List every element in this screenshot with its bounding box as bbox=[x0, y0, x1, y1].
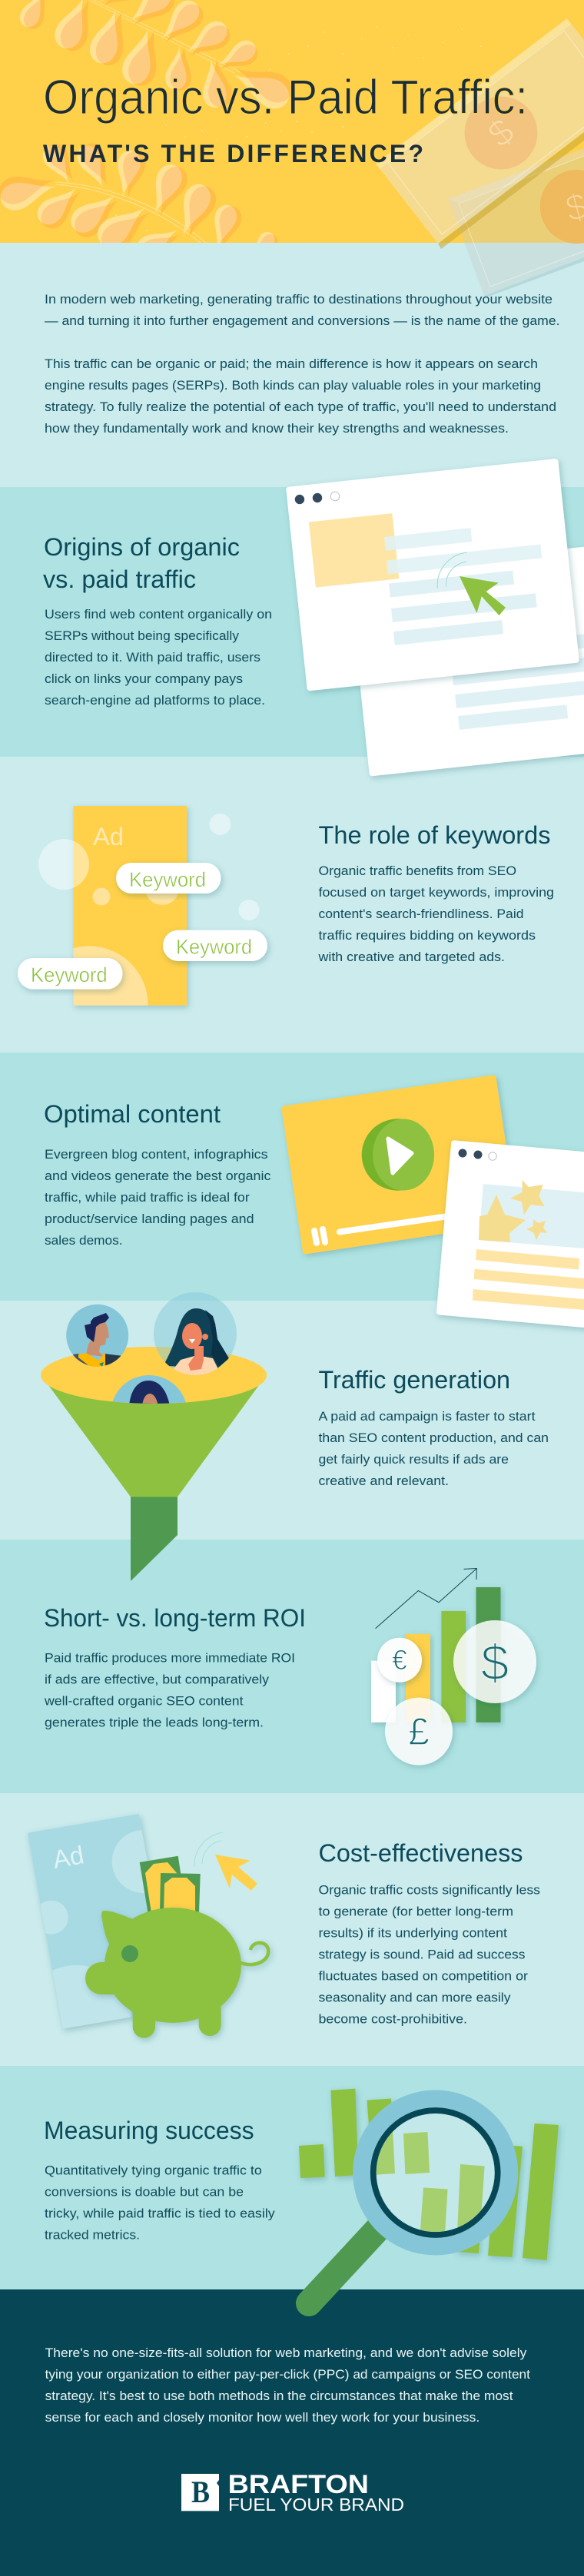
heading: cost-effectiveness: Cost-effectiveness bbox=[318, 1839, 523, 1867]
text block: keywords: traffic requires bidding on keywords bbox=[318, 929, 536, 943]
logo: Brafton: BRAFTON bbox=[228, 2470, 369, 2499]
text block: ROI: generates triple the leads long-term. bbox=[45, 1716, 264, 1730]
text block: traffic generation: A paid ad campaign is faster to start bbox=[318, 1410, 536, 1424]
icon: front banknote bbox=[376, 18, 584, 249]
text block: origins: Users find web content organically on bbox=[45, 608, 272, 622]
icon: back browser window bbox=[348, 538, 584, 777]
icon: yellow cursor with click arcs bbox=[194, 1832, 257, 1891]
icon: ad sheet behind piggy bank bbox=[27, 1814, 151, 2033]
text block: ROI: Paid traffic produces more immediate ROI bbox=[45, 1651, 295, 1665]
heading: measuring success: Measuring success bbox=[44, 2117, 254, 2144]
text block: optimal content: Evergreen blog content, infographics bbox=[45, 1148, 267, 1162]
icon: decorative leaf branches bbox=[0, 0, 482, 267]
text block: origins: directed to it. With paid traffic, users bbox=[45, 651, 260, 665]
chart: bars under magnifying glass bbox=[299, 2089, 559, 2303]
heading: origins: Origins of organic bbox=[44, 533, 240, 561]
text block: origins: search-engine ad platforms to place. bbox=[45, 694, 265, 708]
text block: cost-effectiveness: strategy is sound. Paid ad success bbox=[318, 1948, 526, 1962]
heading: origins bbox=[43, 533, 240, 593]
text block: keywords: Organic traffic benefits from SEO bbox=[318, 864, 516, 878]
text block: intro: strategy. To fully realize the potential of each type of traffic, you'll need to understand bbox=[45, 400, 556, 414]
text block: keywords: focused on target keywords, improving bbox=[318, 886, 554, 900]
icon: front banknote: $ bbox=[480, 111, 522, 155]
text block: ROI: well-crafted organic SEO content bbox=[44, 1695, 244, 1709]
subtitle: WHAT'S THE DIFFERENCE? bbox=[43, 140, 423, 167]
text block: measuring success: tricky, while paid traffic is tied to easily bbox=[45, 2207, 276, 2221]
icon: funnel with avatars bbox=[41, 1292, 267, 1581]
text block: cost-effectiveness: become cost-prohibitive. bbox=[318, 2013, 467, 2027]
text block: keywords bbox=[317, 864, 554, 964]
text block: cost-effectiveness: fluctuates based on competition or bbox=[318, 1970, 529, 1984]
text block: optimal content: and videos generate the best organic bbox=[45, 1169, 270, 1183]
text block: conclusion: There's no one-size-fits-all solution for web marketing, and we don't advise solely bbox=[45, 2346, 527, 2360]
text block: optimal content bbox=[45, 1148, 270, 1248]
text block: traffic generation: than SEO content production, and can bbox=[318, 1431, 549, 1445]
icon: ad card with keywords: Ad bbox=[93, 823, 124, 850]
panel: traffic generation band bbox=[0, 1301, 584, 1540]
text block: origins: click on links your company pays bbox=[45, 672, 243, 686]
text block: cost-effectiveness: Organic traffic costs significantly less bbox=[318, 1884, 540, 1898]
icon: ad card with keywords: Keyword bbox=[129, 868, 206, 891]
text block: measuring success bbox=[45, 2164, 276, 2243]
text block: origins bbox=[45, 608, 272, 708]
text block: intro: how they fundamentally work and know their key strengths and weaknesses. bbox=[45, 422, 509, 436]
icon: ad sheet behind piggy bank: Ad bbox=[51, 1840, 86, 1874]
icon: browser window with stars bbox=[436, 1140, 584, 1332]
icon: front browser window with cursor bbox=[286, 459, 579, 691]
panel: header band bbox=[0, 0, 584, 243]
text block: intro: This traffic can be organic or paid; the main difference is how it appears on search bbox=[45, 357, 538, 371]
text block: intro: engine results pages (SERPs). Both kinds can play valuable roles in your marketing bbox=[45, 379, 541, 393]
text block: traffic generation bbox=[318, 1410, 549, 1488]
text block: optimal content: traffic, while paid traffic is ideal for bbox=[45, 1191, 250, 1205]
text block: conclusion bbox=[45, 2346, 530, 2425]
text block: traffic generation: creative and relevant. bbox=[318, 1474, 449, 1488]
heading: ROI: Short- vs. long-term ROI bbox=[44, 1604, 306, 1632]
icon: video player card bbox=[281, 1075, 517, 1255]
text block: ROI: if ads are effective, but comparatively bbox=[45, 1673, 270, 1687]
text block: optimal content: product/service landing pages and bbox=[45, 1212, 254, 1226]
chart: rising bars with currency coins bbox=[371, 1569, 536, 1765]
icon: back banknote bbox=[448, 148, 584, 297]
text block: cost-effectiveness: seasonality and can more easily bbox=[318, 1991, 511, 2005]
heading: keywords: The role of keywords bbox=[318, 821, 550, 849]
text block: measuring success: Quantitatively tying organic traffic to bbox=[45, 2164, 262, 2178]
text block: intro: — and turning it into further engagement and conversions — is the name of the game. bbox=[45, 314, 559, 328]
icon: ad card with keywords: Keyword bbox=[31, 963, 108, 986]
icon: ad card with keywords bbox=[17, 805, 272, 1011]
logo: Brafton: FUEL YOUR BRAND bbox=[228, 2495, 404, 2515]
text block: intro bbox=[45, 293, 559, 436]
heading: origins: vs. paid traffic bbox=[43, 565, 196, 593]
panel: origins band bbox=[0, 487, 584, 757]
logo: Brafton: B bbox=[191, 2475, 210, 2509]
panel: optimal content band bbox=[0, 1053, 584, 1301]
text block: origins: SERPs without being specifically bbox=[45, 629, 240, 643]
heading: traffic generation: Traffic generation bbox=[318, 1366, 510, 1394]
icon: piggy bank with banknotes bbox=[85, 1856, 268, 2038]
text block: cost-effectiveness bbox=[318, 1884, 540, 2027]
text block: conclusion: strategy. It's best to use both methods in the circumstances that make the most bbox=[45, 2389, 513, 2403]
panel: cost-effectiveness band bbox=[0, 1793, 584, 2066]
logo: Brafton bbox=[181, 2470, 404, 2515]
chart: rising bars with currency coins: € bbox=[392, 1644, 407, 1676]
text block: cost-effectiveness: to generate (for better long-term bbox=[318, 1905, 513, 1919]
title: Organic vs. Paid Traffic: bbox=[43, 71, 528, 124]
text block: keywords: with creative and targeted ads. bbox=[317, 950, 505, 964]
text block: traffic generation: get fairly quick results if ads are bbox=[318, 1453, 509, 1467]
text block: keywords: content's search-friendliness. Paid bbox=[318, 907, 524, 921]
panel: ROI band bbox=[0, 1540, 584, 1793]
text block: measuring success: conversions is doable but can be bbox=[45, 2186, 244, 2200]
text block: optimal content: sales demos. bbox=[45, 1234, 123, 1248]
text block: conclusion: tying your organization to either pay-per-click (PPC) ad campaigns or SEO content bbox=[45, 2368, 530, 2382]
text block: cost-effectiveness: results) if its underlying content bbox=[318, 1927, 507, 1941]
panel: intro band bbox=[0, 243, 584, 487]
chart: rising bars with currency coins: $ bbox=[481, 1634, 509, 1691]
panel: keywords band bbox=[0, 757, 584, 1053]
text block: conclusion: sense for each and closely monitor how well they work for your business. bbox=[45, 2411, 479, 2425]
panel: footer band bbox=[0, 2289, 584, 2576]
text block: measuring success: tracked metrics. bbox=[45, 2229, 140, 2243]
panel: measuring success band bbox=[0, 2066, 584, 2289]
icon: ad card with keywords: Keyword bbox=[176, 936, 252, 959]
text block: ROI bbox=[44, 1651, 295, 1730]
heading: optimal content: Optimal content bbox=[44, 1100, 221, 1128]
text block: intro: In modern web marketing, generating traffic to destinations throughout your website bbox=[45, 293, 552, 307]
chart: rising bars with currency coins: £ bbox=[408, 1710, 430, 1753]
